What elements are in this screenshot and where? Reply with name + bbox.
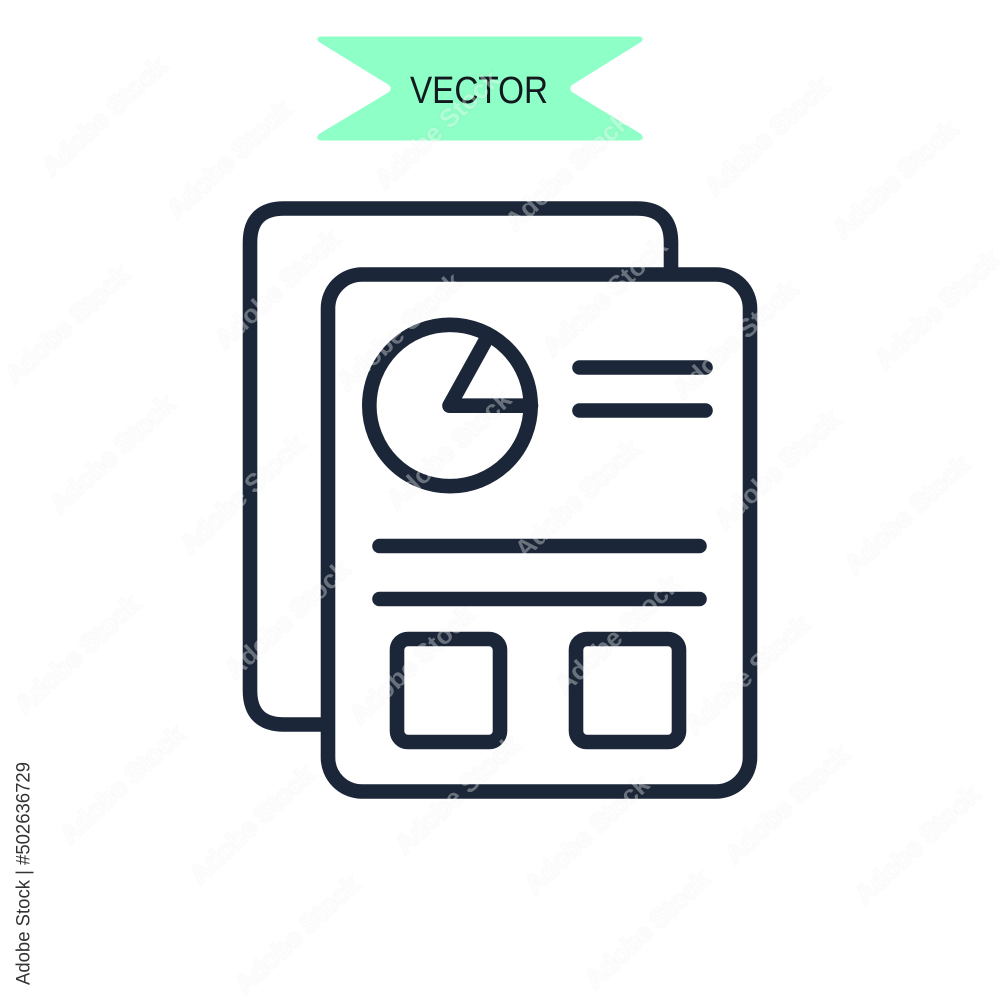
watermark pattern: Adobe Stock [36, 51, 173, 181]
watermark pattern: Adobe Stock [44, 389, 181, 519]
watermark pattern: Adobe Stock [699, 71, 836, 201]
watermark pattern: Adobe Stock [519, 769, 656, 899]
watermark pattern: Adobe Stock [9, 589, 146, 719]
icon: report documents [250, 208, 750, 792]
watermark pattern: Adobe Stock [667, 274, 804, 404]
watermark pattern: Adobe Stock [161, 94, 298, 224]
short text lines [580, 368, 706, 410]
back page [250, 208, 671, 724]
stock image id: Adobe Stock | #502636729 [12, 762, 34, 985]
watermark pattern: Adobe Stock [549, 569, 686, 699]
watermark pattern: Adobe Stock [331, 266, 468, 396]
watermark pattern: Adobe Stock [827, 114, 964, 244]
watermark pattern: Adobe Stock [381, 384, 518, 514]
watermark pattern: Adobe Stock [219, 554, 356, 684]
vector ribbon banner [317, 36, 643, 140]
pie chart [369, 325, 531, 486]
watermark pattern: Adobe Stock [174, 429, 311, 559]
watermark pattern: Adobe Stock [369, 64, 506, 194]
watermark pattern: Adobe Stock [209, 224, 346, 354]
watermark pattern: Adobe Stock [0, 259, 136, 389]
watermark pattern: Adobe Stock [509, 434, 646, 564]
watermark pattern: Adobe Stock [849, 779, 986, 909]
watermark pattern: Adobe Stock [229, 869, 366, 999]
watermark pattern: Adobe Stock [54, 719, 191, 849]
watermark pattern: Adobe Stock [679, 609, 816, 739]
long text lines [380, 546, 700, 599]
ribbon label: VECTOR [410, 70, 548, 112]
watermark pattern: Adobe Stock [579, 864, 716, 994]
front page [328, 274, 750, 792]
ribbon shape [317, 36, 643, 140]
watermark pattern: Adobe Stock [719, 739, 856, 869]
watermark pattern: Adobe Stock [537, 231, 674, 361]
watermark pattern: Adobe Stock [184, 759, 321, 889]
watermark pattern: Adobe Stock [389, 729, 526, 859]
watermark pattern: Adobe Stock [499, 106, 636, 236]
watermark pattern: Adobe Stock [344, 599, 481, 729]
right square [576, 639, 679, 742]
watermark pattern: Adobe Stock [839, 449, 976, 579]
watermark pattern: Adobe Stock [709, 404, 846, 534]
left square [397, 639, 500, 742]
